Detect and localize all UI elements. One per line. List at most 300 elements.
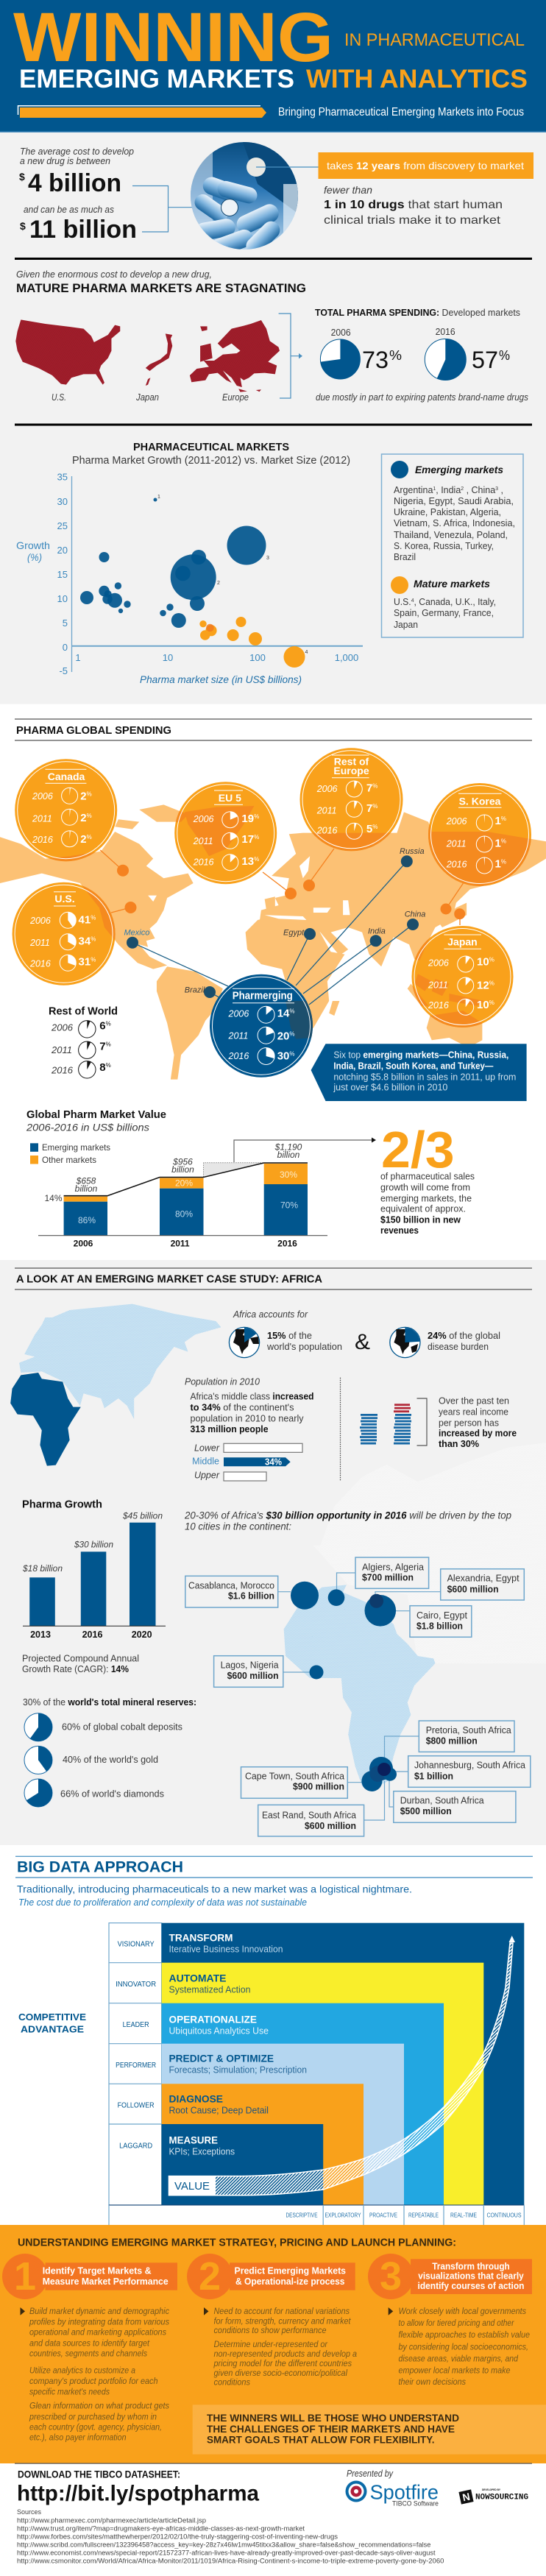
list: mature countries: Spain, Germany, France,	[394, 608, 494, 618]
maturity matrix	[109, 1923, 524, 2225]
x axis labels: 1	[75, 652, 81, 663]
class bars	[192, 1443, 302, 1481]
bar chart: pharma growth: $45 billion	[122, 1510, 163, 1521]
bar: 2011: 20%	[175, 1178, 193, 1189]
level: predict and optimize: Forecasts; Simulation; Prescription	[169, 2064, 307, 2076]
list: emerging countries: , China	[464, 485, 495, 495]
list: mature countries: U.S.	[394, 597, 411, 607]
bar chart: pharma growth	[22, 1510, 166, 1640]
step 1	[2, 2254, 177, 2299]
callout: the winners: THE WINNERS WILL BE THOSE WHO UNDERSTAND	[207, 2412, 459, 2424]
bar: 2011: billion	[171, 1164, 194, 1175]
step 3	[368, 2254, 532, 2299]
column 1 text: Utilize analytics to customize a	[29, 2365, 135, 2375]
step 3: Transform through	[432, 2260, 510, 2271]
text: big data intro	[17, 1883, 412, 1908]
pie: cobalt: 60% of global cobalt deposits	[62, 1722, 182, 1733]
row: 2016: 2016	[428, 1000, 449, 1011]
box: Algiers	[355, 1557, 429, 1588]
stat: 2/3: equivalent of approx.	[380, 1204, 466, 1214]
bar: 2006: 14%	[44, 1193, 63, 1203]
step 3: visualizations that clearly	[418, 2271, 524, 2282]
text: 1 in 10 drugs: fewer than	[324, 184, 372, 196]
column 1 text: specific market's needs	[29, 2386, 110, 2396]
bubble footnote numbers	[157, 495, 308, 655]
bar: middle	[192, 1456, 291, 1468]
heading: total pharma spending: TOTAL PHARMA SPENDING: Developed markets	[315, 307, 520, 318]
stacked bar chart: 2006	[74, 1238, 93, 1248]
footer: sources: http://www.forbes.com/sites/matthewherper/2012/02/10/the-truly-staggering-cost-of-inventing-new-drugs	[17, 2533, 338, 2540]
callout: six top emerging markets: Six top emerging markets—China, Russia,	[333, 1050, 508, 1061]
bubble: Rest of Europe	[300, 748, 403, 851]
bubble: Canada: Canada	[48, 771, 85, 782]
row: 2011: %	[91, 935, 96, 942]
chart title: Pharma Market Growth (2011-2012) vs. Market Size (2012)	[72, 454, 350, 467]
row: 2016	[316, 823, 377, 839]
bar: 2006: 86%	[78, 1215, 96, 1225]
labels: pharmerging countries: India	[368, 927, 386, 935]
text: real income: increased by more	[439, 1429, 517, 1439]
pie: 2006 73%: 73	[362, 347, 389, 373]
box: Johannesburg: Johannesburg, South Africa	[414, 1760, 526, 1771]
level: diagnose: DIAGNOSE	[169, 2093, 223, 2105]
row: 2011: 2011	[32, 814, 52, 824]
dots: pharmerging countries	[127, 855, 419, 998]
step 2	[187, 2254, 355, 2299]
list: emerging countries	[394, 485, 515, 562]
text: real income: years real income	[439, 1406, 508, 1417]
text: 24% disease: disease burden	[428, 1342, 489, 1352]
level: predict and optimize: PREDICT & OPTIMIZE	[169, 2053, 274, 2064]
bubble: Canada	[15, 759, 118, 861]
stacked bar chart: 2011	[171, 1238, 190, 1248]
bar: lower	[194, 1443, 302, 1454]
labels: pharmerging countries: Brazil	[185, 986, 205, 995]
row: 2011: %	[106, 1041, 111, 1048]
logo: Nowsourcing: N	[461, 2491, 471, 2503]
row: 2016: %	[489, 999, 494, 1006]
box: Johannesburg	[408, 1756, 531, 1787]
column 1 text: prescribed or purchased by whom in	[29, 2411, 157, 2421]
cost text: left column	[19, 146, 137, 244]
text: top 10 cities	[184, 1510, 511, 1532]
map: africa dark	[10, 1373, 81, 1466]
bubble footnote numbers: 1	[157, 495, 160, 500]
axis labels: CONTINUOUS	[487, 2212, 522, 2219]
bar chart: pharma growth: $30 billion	[74, 1540, 113, 1550]
heading: mature markets: MATURE PHARMA MARKETS ARE STAGNATING	[16, 281, 306, 295]
labels: pharmerging countries: Mexico	[124, 929, 149, 938]
row: 2016: 2016	[316, 826, 338, 836]
logo: Spotfire	[346, 2480, 439, 2507]
row: 2016	[446, 857, 506, 874]
column 1 text: operational and marketing applications	[29, 2327, 166, 2338]
title: emerging markets: EMERGING MARKETS	[19, 65, 294, 93]
row: 2011: 1	[494, 838, 501, 850]
chart title: global pharm market value	[26, 1109, 166, 1133]
heading: big data approach: BIG DATA APPROACH	[17, 1858, 183, 1875]
list: emerging countries: Thailand, Venezula, Poland,	[394, 530, 508, 540]
row: 2016: 2016	[193, 857, 214, 868]
footer: sources: http://www.economist.com/news/special-report/21572377-african-lives-have-already-greatly-improved-over-past-decade-says-oliver-august	[17, 2550, 436, 2557]
map labels	[52, 392, 249, 403]
map: United States	[15, 319, 120, 385]
bar: 2016: 70%	[280, 1200, 298, 1211]
globe: 15%	[229, 1327, 260, 1358]
row: 2016: %	[106, 1062, 111, 1069]
step 1: 1	[14, 2254, 36, 2299]
row: 2016: %	[372, 824, 377, 830]
header banner	[0, 0, 546, 132]
pie: 2016 57%: %	[499, 348, 510, 363]
column 1 text: Build market dynamic and demographic	[29, 2306, 169, 2316]
bar: 2011	[160, 1156, 203, 1236]
level: measure	[162, 2124, 323, 2205]
row: 2016: 2016	[32, 835, 53, 845]
text: 1 in 10 drugs: 1 in 10 drugs that start human	[324, 199, 503, 211]
box: Casablanca: $1.6 billion	[228, 1590, 274, 1602]
text: population in 2010: population in 2010 to nearly	[190, 1414, 304, 1424]
column 1 text	[21, 2306, 169, 2443]
chart legend: Other markets	[42, 1155, 96, 1165]
x axis labels	[75, 652, 358, 663]
bubble: U.S.	[12, 882, 116, 986]
map: africa hatched	[284, 1585, 436, 1791]
stat: 2/3: 2/3	[381, 1121, 455, 1178]
row: 2011: 17	[241, 833, 254, 846]
bubble footnote numbers: 4	[305, 650, 308, 655]
legend: emerging: Emerging markets	[415, 464, 503, 475]
y axis labels: 5	[63, 618, 68, 629]
row: 2011: %	[501, 838, 506, 845]
row: 2006: 2006	[32, 791, 53, 802]
row: 2016: 31	[78, 956, 91, 969]
bar: middle: 34%	[265, 1457, 282, 1468]
text: CAGR	[22, 1653, 139, 1674]
level: operationalize: OPERATIONALIZE	[169, 2013, 257, 2025]
row: 2016: 2016	[228, 1051, 249, 1061]
bar: 2011: $956	[172, 1156, 193, 1167]
bubble: Japan: Japan	[447, 935, 478, 947]
row: 2006: 2	[80, 790, 87, 803]
text: top 10 cities: 20-30% of Africa's $30 billion opportunity in 2016 will be driven by the top	[184, 1510, 511, 1521]
left labels column	[109, 1923, 162, 2205]
chart title	[72, 441, 350, 467]
text: real income: than 30%	[439, 1439, 479, 1449]
text: 24% disease: 24% of the global	[428, 1331, 500, 1341]
bubble: S. Korea: S. Korea	[459, 795, 501, 807]
mature bubbles	[199, 617, 305, 668]
row: 2016: %	[87, 834, 92, 841]
footer: sources: http://www.scribd.com/fullscreen/132396458?access_key=key-28z7x46lw1mw45titxx3&allow_share=false&show_recommendations=false	[17, 2541, 430, 2549]
row: 2006: %	[87, 791, 92, 798]
column 3 text: to allow for tiered pricing and other	[399, 2318, 514, 2328]
box: Cairo: Cairo, Egypt	[416, 1610, 467, 1621]
level: measure: KPIs; Exceptions	[169, 2145, 235, 2156]
step 3: 3	[380, 2254, 402, 2299]
box: Lagos: $600 million	[227, 1670, 279, 1681]
axis labels: PROACTIVE	[369, 2212, 397, 2219]
heading: strategy: UNDERSTANDING EMERGING MARKET STRATEGY, PRICING AND LAUNCH PLANNING:	[18, 2237, 456, 2249]
box: Durban	[394, 1791, 516, 1822]
bar: 2016	[264, 1142, 308, 1236]
text: CAGR: Growth Rate (CAGR): 14%	[22, 1664, 129, 1674]
callout: the winners: SMART GOALS THAT ALLOW FOR FLEXIBILITY.	[207, 2434, 434, 2446]
column 1 text: etc.), also payer information	[29, 2432, 127, 2443]
y axis labels: -5	[59, 665, 68, 676]
box: Lagos	[214, 1656, 283, 1687]
step 2: & Operational-ize process	[235, 2276, 344, 2287]
city bubbles	[291, 1582, 397, 1791]
callout: six top emerging markets: just over $4.6 billion in 2010	[333, 1083, 447, 1093]
ampersand: &	[355, 1330, 370, 1354]
callout: six top emerging markets	[311, 1044, 527, 1101]
text: top 10 cities: 10 cities in the continent:	[185, 1521, 291, 1532]
row: 2011: 7	[366, 802, 372, 815]
list: emerging countries: Argentina	[394, 485, 433, 495]
logo: Nowsourcing: DEVELOPED BY	[482, 2488, 500, 2491]
cost text: left column: $	[19, 171, 25, 183]
y axis labels: 0	[63, 642, 68, 653]
rest of world: Rest of World	[49, 1005, 118, 1017]
left labels column: INNOVATOR	[116, 1981, 156, 1989]
bubble: S. Korea	[428, 783, 531, 886]
bubble: EU 5: EU 5	[219, 792, 241, 804]
row: 2011: %	[489, 980, 494, 986]
cost text: left column: a new drug is between	[20, 156, 110, 166]
row: 2006: 2006	[29, 916, 51, 926]
row: 2011: 12	[477, 979, 489, 991]
level: transform: TRANSFORM	[169, 1931, 233, 1943]
chart legend: Emerging markets	[42, 1142, 110, 1153]
pie: diamonds	[24, 1779, 164, 1807]
axis titles: Growth	[16, 539, 50, 551]
box: Lagos: Lagos, Nigeria	[221, 1660, 279, 1671]
row: 2011: %	[372, 803, 377, 810]
chart title: global pharm market value: Global Pharm Market Value	[26, 1109, 166, 1121]
dots: mature markets	[117, 865, 465, 919]
text: CAGR: Projected Compound Annual	[22, 1653, 139, 1663]
legend: mature: Mature markets	[414, 578, 490, 590]
y axis labels: 30	[57, 496, 68, 507]
column 3 text: empower local markets to make	[399, 2365, 511, 2375]
column 1 text: and data sources to identify target	[29, 2338, 150, 2348]
callout: the winners	[193, 2405, 546, 2455]
bar chart: pharma growth: $18 billion	[22, 1563, 63, 1574]
stat: 2/3: $150 billion in new	[380, 1214, 461, 1225]
callout: six top emerging markets: India, Brazil, South Korea, and Turkey—	[333, 1061, 494, 1071]
column 3 text: by considering local socioeconomics,	[399, 2341, 528, 2352]
bubble: EU 5	[174, 782, 277, 885]
row: 2011: 7	[99, 1041, 106, 1053]
row: 2006	[316, 781, 377, 797]
row: 2006: 2006	[316, 784, 338, 794]
left labels column: VISIONARY	[118, 1940, 155, 1948]
x axis labels: 100	[249, 652, 266, 663]
bubble: Pharmerging	[210, 974, 313, 1078]
note: patents: due mostly in part to expiring patents brand-name drugs	[316, 392, 528, 403]
cost text: left column: $	[20, 220, 26, 232]
bar: 2006: $658	[76, 1175, 96, 1186]
stat: 2/3	[380, 1121, 475, 1236]
list: emerging countries: Brazil	[394, 552, 416, 562]
level: transform	[162, 1923, 524, 2205]
footer: download: DOWNLOAD THE TIBCO DATASHEET:	[18, 2469, 180, 2480]
footer: download: http://bit.ly/spotpharma	[17, 2481, 259, 2505]
title: with analytics: WITH ANALYTICS	[306, 65, 528, 93]
text: competitive advantage	[18, 2011, 86, 2035]
bubble chart	[16, 471, 363, 685]
column 3 text: Work closely with local governments	[399, 2306, 526, 2316]
bubble footnote numbers: 2	[217, 581, 220, 586]
box: Casablanca: Casablanca, Morocco	[188, 1579, 274, 1590]
row: 2016: 10	[477, 999, 489, 1011]
left labels column: LEADER	[123, 2021, 149, 2029]
row: 2011	[29, 934, 96, 950]
column 2 text	[204, 2306, 357, 2388]
bubble: Japan	[412, 926, 514, 1027]
text: africa accounts for: Africa accounts for	[233, 1309, 308, 1320]
pie: gold	[24, 1746, 158, 1774]
row: 2016: 5	[366, 823, 372, 835]
world map	[0, 804, 546, 1080]
bubble: U.S.: U.S.	[54, 893, 75, 905]
axis titles: (%)	[27, 551, 42, 563]
text: 15% population	[266, 1331, 342, 1352]
row: 2016: %	[91, 957, 96, 963]
row: 2006: 7	[366, 782, 372, 795]
bubble: Rest of Europe: Europe	[333, 765, 369, 776]
pie: 2006 73%	[320, 327, 402, 379]
income stacks	[360, 1404, 411, 1444]
list: emerging countries: S. Korea, Russia, Turkey,	[394, 541, 494, 551]
row: 2006	[428, 956, 494, 972]
text: competitive advantage: ADVANTAGE	[21, 2024, 84, 2035]
axis labels: REAL-TIME	[450, 2212, 477, 2219]
bubble footnote numbers: 3	[266, 556, 269, 561]
row: 2011: 2011	[428, 980, 448, 990]
list: mature countries	[394, 597, 496, 630]
bar chart: pharma growth: 2016	[82, 1630, 102, 1640]
text: mineral reserves: 30% of the world's total mineral reserves:	[23, 1697, 196, 1708]
list: emerging countries: 2	[461, 486, 464, 492]
bracket connector to pills	[132, 185, 221, 232]
y axis labels: 35	[57, 471, 68, 483]
column 3 text	[389, 2306, 530, 2387]
list: emerging countries: ,	[498, 485, 503, 495]
connector to orange callout	[256, 166, 319, 168]
axis labels: EXPLORATORY	[325, 2212, 361, 2219]
callout: 12 years: takes 12 years from discovery to market	[327, 160, 524, 171]
y axis labels: 20	[57, 545, 68, 556]
row: 2016: 2016	[51, 1065, 74, 1076]
arrow bar	[18, 106, 266, 118]
row: 2011: 2	[80, 812, 87, 824]
chart legend	[30, 1142, 110, 1165]
labels: pharmerging countries: Russia	[400, 847, 425, 856]
row: 2016	[29, 955, 96, 971]
box: Pretoria: $800 million	[426, 1735, 478, 1746]
text: 1 in 10 drugs: clinical trials make it to market	[324, 214, 501, 227]
cost text: left column: and can be as much as	[24, 205, 114, 215]
row: 2011: 2011	[193, 836, 213, 846]
footer: sources: Sources	[17, 2508, 42, 2516]
box: Pretoria	[419, 1721, 514, 1752]
text: presented by: Presented by	[347, 2469, 394, 2479]
text: 1 in 10 drugs	[324, 184, 503, 227]
pie: 2016 57%: 57	[472, 347, 498, 373]
row: 2016: 2	[80, 833, 87, 846]
text: big data intro: The cost due to proliferation and complexity of data was not sustainable	[18, 1897, 307, 1908]
row: 2016	[193, 854, 259, 871]
list: emerging countries: , India	[436, 485, 461, 495]
row: 2006	[446, 815, 506, 831]
level: automate: AUTOMATE	[169, 1972, 227, 1984]
level: diagnose	[162, 2084, 364, 2205]
chart title: PHARMACEUTICAL MARKETS	[133, 441, 289, 453]
row: 2011: 2011	[446, 839, 467, 849]
y axis labels: 25	[57, 520, 68, 531]
row: 2011: %	[289, 1030, 295, 1037]
pie: 2006 73%: %	[389, 348, 402, 363]
logo: Nowsourcing: NOWSOURCING	[475, 2494, 528, 2502]
level: transform: Iterative Business Innovation	[169, 1943, 283, 1954]
callout: 12 years	[318, 152, 533, 179]
row: 2016: 2016	[29, 958, 51, 969]
bar: 2011: 80%	[175, 1209, 193, 1219]
pie: diamonds: 66% of world's diamonds	[60, 1789, 164, 1800]
cost text: left column: 4 billion	[28, 169, 121, 197]
column 2 text: given diverse socio-economic/political	[213, 2368, 347, 2378]
row: 2006: 19	[241, 813, 254, 825]
connectors: pharmerging	[132, 861, 413, 1005]
bar: upper	[194, 1471, 266, 1481]
row: 2006	[29, 912, 96, 928]
pie: gold: 40% of the world's gold	[63, 1755, 158, 1765]
y axis labels: 15	[57, 569, 68, 580]
axis titles	[16, 539, 302, 685]
column 2 text: Determine under-represented or	[213, 2339, 328, 2349]
text: population in 2010	[185, 1377, 313, 1434]
row: 2006	[51, 1019, 111, 1038]
row: 2006: %	[489, 957, 494, 963]
box: Pretoria: Pretoria, South Africa	[426, 1724, 511, 1735]
row: 2011	[228, 1027, 295, 1044]
value curve arrow	[169, 1936, 515, 2195]
row: 2011	[446, 836, 506, 852]
left labels column: FOLLOWER	[118, 2102, 155, 2110]
row: 2006: %	[254, 813, 259, 820]
row: 2016	[32, 831, 92, 847]
heading: global spending: PHARMA GLOBAL SPENDING	[16, 724, 171, 737]
axis labels	[109, 2205, 524, 2225]
legend panel	[381, 454, 523, 637]
stat: 2/3: of pharmaceutical sales	[380, 1172, 475, 1182]
bar: 2016: billion	[277, 1150, 300, 1160]
level: predict and optimize	[162, 2044, 404, 2205]
heading: mature markets: Given the enormous cost to develop a new drug,	[16, 269, 212, 280]
row: 2006: %	[91, 914, 96, 921]
row: 2011: 2011	[228, 1031, 248, 1041]
box: Cairo: $1.8 billion	[416, 1620, 463, 1631]
level: automate: Systematized Action	[169, 1984, 250, 1995]
row: 2006: %	[372, 783, 377, 790]
row: 2016: 1	[494, 857, 501, 870]
box: Durban: $500 million	[400, 1805, 452, 1816]
footer: sources: http://www.trust.org/item/?map=drugmakers-eye-africas-middle-classes-as-next-growth-market	[17, 2524, 305, 2532]
column 1 text: company's product portfolio for each	[29, 2376, 158, 2386]
bar chart: pharma growth: 2020	[132, 1630, 152, 1640]
